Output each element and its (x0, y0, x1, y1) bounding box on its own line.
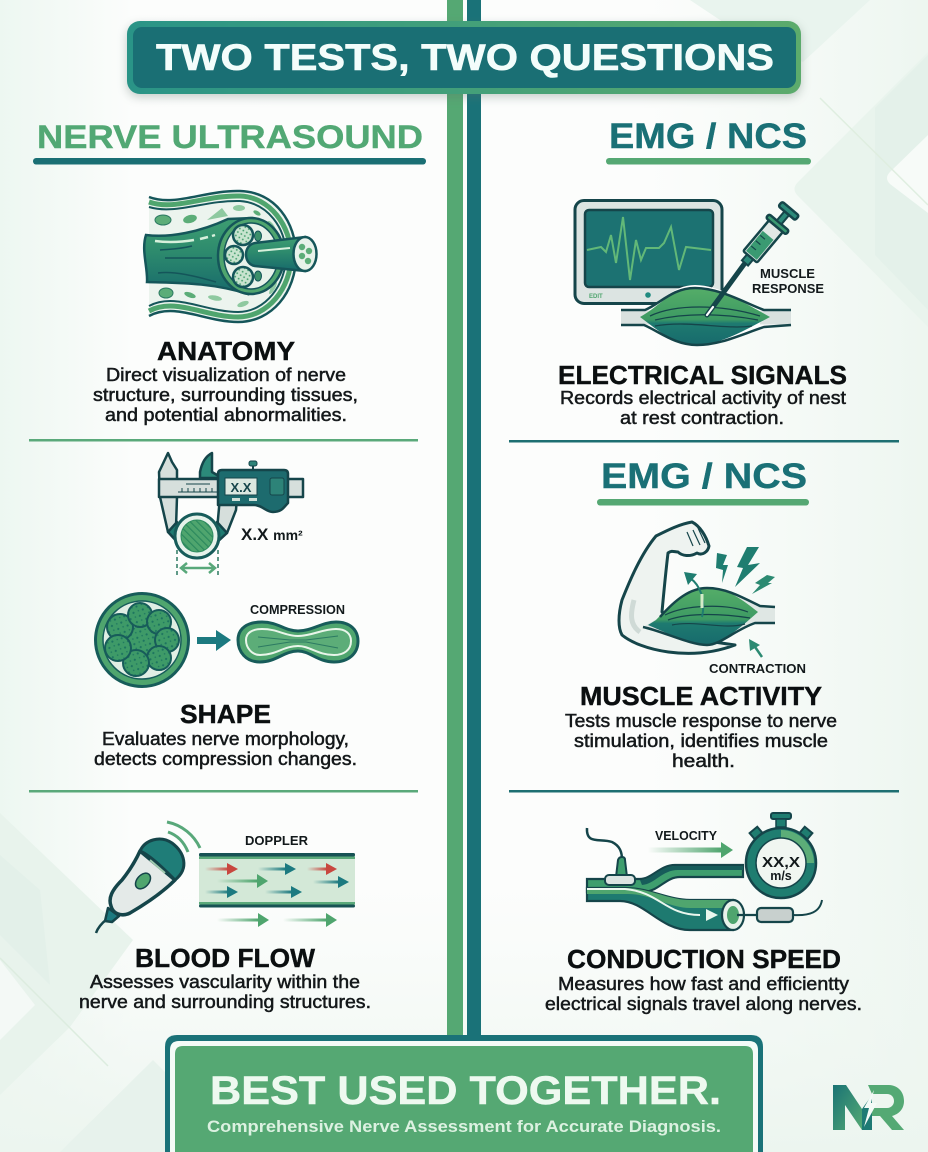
heading: nerve ultrasound (33, 119, 426, 164)
icon: flexed arm with muscle: CONTRACTION (709, 661, 806, 676)
heading: nerve ultrasound: NERVE ULTRASOUND (37, 119, 423, 155)
logo: NR (833, 1085, 904, 1130)
text: conduction speed: CONDUCTION SPEED (567, 944, 841, 974)
icon: nerve cross-section compressed (96, 594, 358, 686)
text: conduction speed: Measures how fast and efficientty (558, 974, 849, 994)
heading: EMG / NCS second (597, 457, 809, 506)
heading: EMG / NCS top: EMG / NCS (609, 117, 807, 156)
stopwatch (746, 813, 816, 898)
text: conduction speed: electrical signals travel along nerves. (545, 994, 862, 1014)
stopwatch: m/s (770, 869, 792, 883)
icon: syringe (735, 200, 801, 271)
icon: syringe needle (707, 263, 745, 315)
text: electrical signals: Records electrical activity of nest (560, 388, 846, 408)
icon: EMG monitor, needle and muscle (575, 200, 824, 345)
text: shape: SHAPE (180, 699, 271, 729)
icon: nerve anatomy cross-section (144, 191, 316, 322)
panel: nerve ultrasound column (29, 119, 426, 1012)
text: blood flow: nerve and surrounding structures. (79, 992, 371, 1012)
stopwatch: XX,X (762, 854, 800, 871)
icon: caliper measuring nerve: X.X (231, 480, 252, 495)
text: anatomy: structure, surrounding tissues, (93, 385, 358, 405)
icon: nerve conduction with stopwatch (587, 813, 822, 930)
text: anatomy: ANATOMY (157, 336, 295, 366)
bottom banner: BEST USED TOGETHER. (210, 1069, 721, 1113)
central divider bars (447, 0, 481, 1040)
text: blood flow (79, 943, 371, 1012)
icon: ultrasound probe and doppler vessel: DOPPLER (245, 834, 308, 848)
text: shape: detects compression changes. (94, 749, 357, 769)
arrow: compression transition (197, 630, 231, 651)
text: anatomy (93, 336, 358, 425)
icon: flexed arm with muscle (619, 522, 806, 676)
icon: EMG monitor, needle and muscle: RESPONSE (752, 281, 824, 296)
panel: EMG / NCS column (509, 117, 899, 1014)
text: shape: Evaluates nerve morphology, (102, 729, 349, 749)
icon: nerve cross-section compressed: COMPRESSION (250, 603, 345, 617)
text: blood flow: Assesses vascularity within the (90, 972, 360, 992)
text: muscle activity: health. (672, 751, 735, 771)
heading: EMG / NCS second: EMG / NCS (601, 457, 807, 496)
bottom banner (165, 1035, 763, 1152)
text: electrical signals (558, 360, 847, 428)
text: electrical signals: at rest contraction. (620, 408, 784, 428)
icon: ultrasound probe and doppler vessel (96, 822, 355, 933)
text: electrical signals: ELECTRICAL SIGNALS (558, 360, 847, 390)
title banner (127, 21, 801, 97)
bottom banner: Comprehensive Nerve Assessment for Accurate Diagnosis. (207, 1118, 721, 1136)
title banner: TWO TESTS, TWO QUESTIONS (156, 37, 774, 78)
text: shape (94, 699, 357, 769)
text: conduction speed (545, 944, 862, 1014)
text: anatomy: Direct visualization of nerve (106, 365, 346, 385)
text: blood flow: BLOOD FLOW (135, 943, 315, 973)
icon: EMG monitor, needle and muscle: MUSCLE (760, 266, 815, 281)
icon: EMG monitor, needle and muscle: EDIT (589, 294, 603, 300)
nerve branches (587, 865, 744, 930)
text: anatomy: and potential abnormalities. (105, 405, 347, 425)
text: muscle activity: MUSCLE ACTIVITY (580, 681, 822, 711)
text: muscle activity: Tests muscle response to nerve (565, 711, 837, 731)
icon: caliper measuring nerve (159, 453, 303, 577)
text: muscle activity: stimulation, identifies muscle (574, 731, 828, 751)
icon: nerve conduction with stopwatch: VELOCITY (655, 829, 718, 843)
text: muscle activity (565, 681, 837, 771)
icon: caliper measuring nerve: X.X mm² (241, 525, 303, 544)
